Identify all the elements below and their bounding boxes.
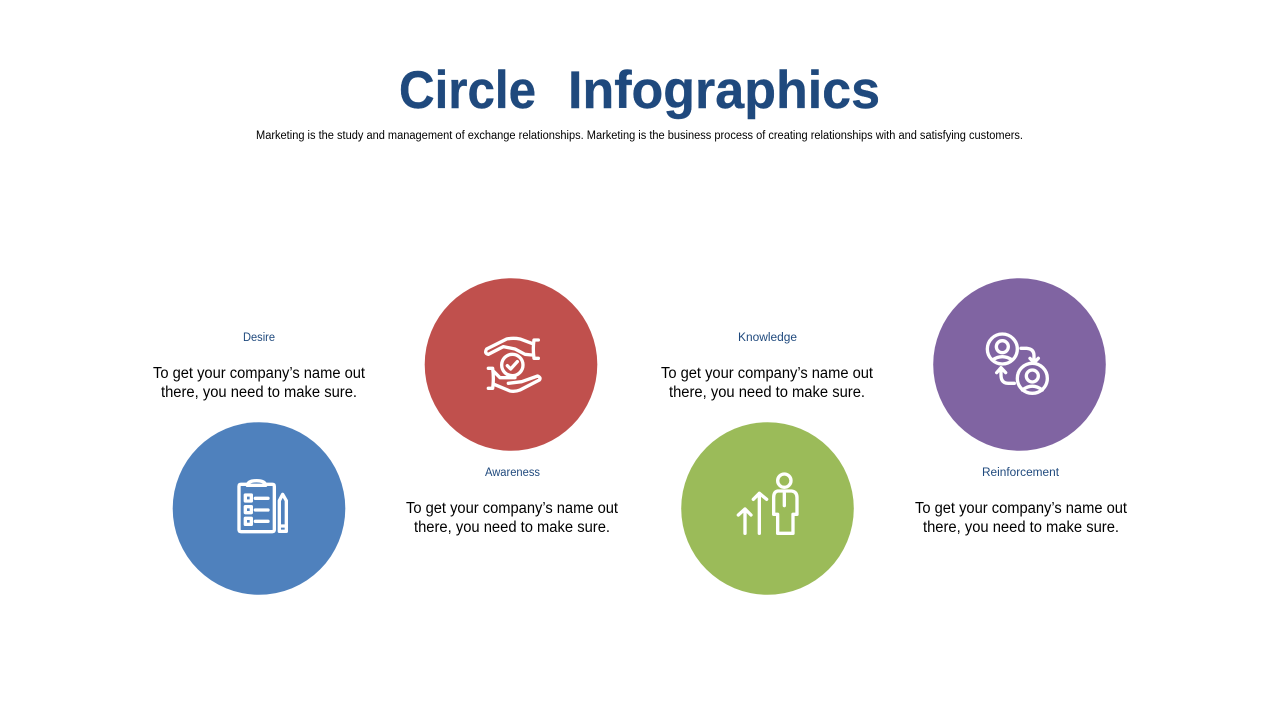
text block: desire: To get your company’s name out — [153, 365, 366, 382]
text block: awareness — [406, 500, 619, 536]
text block: knowledge: To get your company’s name out — [661, 365, 874, 382]
text block: knowledge — [661, 365, 874, 401]
icon: people exchange — [987, 334, 1047, 393]
circle: desire — [173, 422, 345, 595]
text block: awareness: To get your company’s name out — [406, 500, 619, 517]
text block: reinforcement: there, you need to make sure. — [923, 519, 1119, 536]
icon: hands holding check — [486, 338, 540, 391]
label: knowledge: Knowledge — [738, 332, 797, 344]
icon: clipboard and pencil — [239, 481, 286, 532]
circle: awareness — [425, 278, 597, 451]
circle: knowledge — [681, 422, 854, 595]
label: awareness: Awareness — [485, 467, 540, 479]
subtitle: Marketing is the study and management of exchange relationships. Marketing is the business process of creating relationships with and satisfying customers. — [256, 130, 1023, 142]
panel: knowledge — [661, 332, 874, 595]
panel: awareness — [406, 278, 619, 536]
text block: reinforcement — [915, 500, 1128, 536]
title — [399, 61, 880, 120]
title: Circle — [399, 61, 536, 120]
title: Infographics — [568, 61, 880, 120]
label: reinforcement: Reinforcement — [982, 467, 1060, 479]
text block: awareness: there, you need to make sure. — [414, 519, 610, 536]
text block: reinforcement: To get your company’s name out — [915, 500, 1128, 517]
icon: person with growth arrows — [738, 474, 797, 533]
panel: desire — [153, 332, 366, 595]
label: desire: Desire — [243, 332, 275, 344]
text block: knowledge: there, you need to make sure. — [669, 384, 865, 401]
panel: reinforcement — [915, 278, 1128, 536]
text block: desire — [153, 365, 366, 401]
text block: desire: there, you need to make sure. — [161, 384, 357, 401]
circle: reinforcement — [933, 278, 1106, 451]
